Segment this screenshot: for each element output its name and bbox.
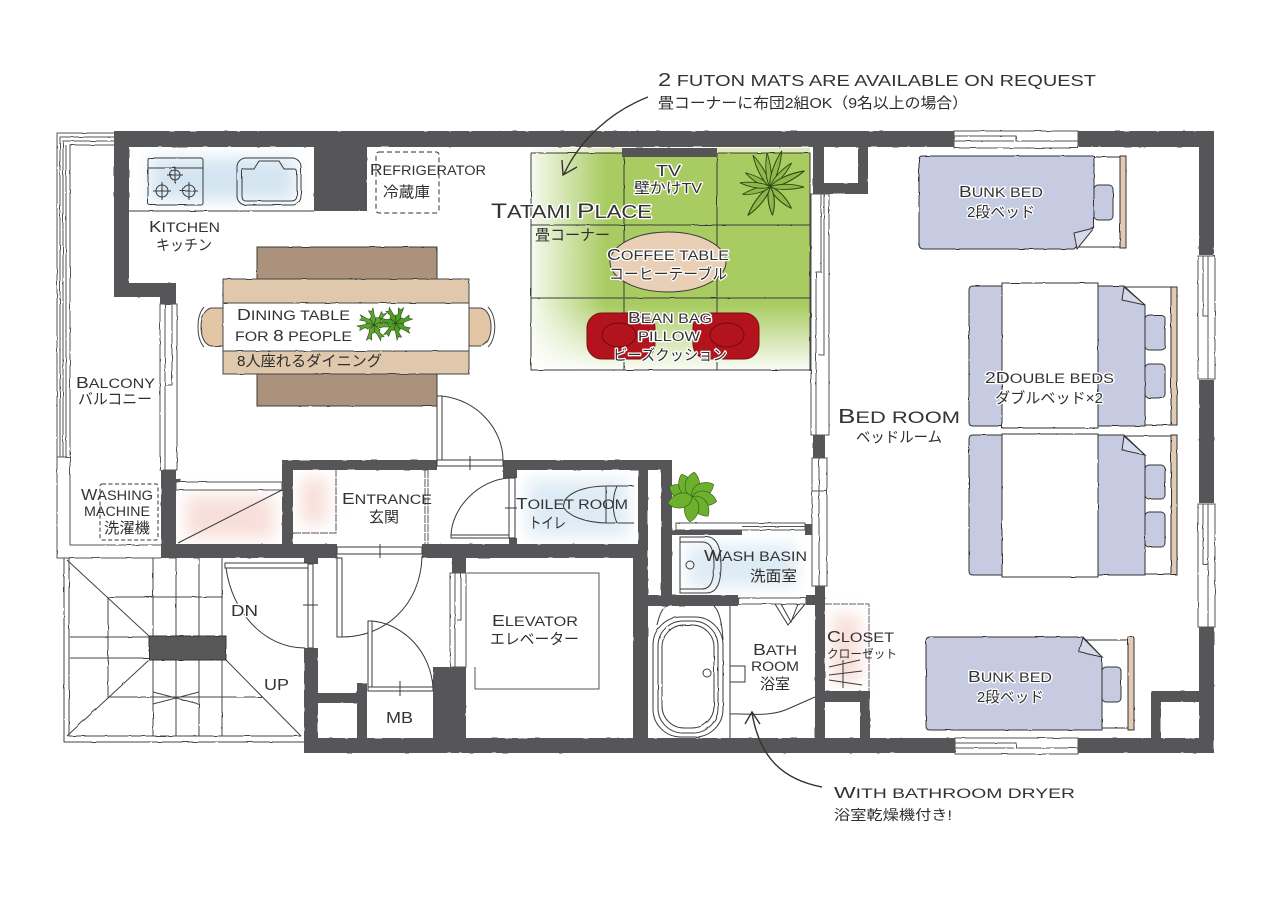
label: coffee table: コーヒーテーブル [609,265,727,283]
label: balcony: BALCONY [76,374,155,392]
label: bean bag pillow: PILLOW [638,329,700,344]
label: tatami place: TATAMI PLACE [491,199,652,223]
window: diagonal closet [176,482,282,490]
kitchen counter tint [150,158,295,200]
label: wash basin: 洗面室 [750,568,797,585]
stove [148,158,203,205]
label: TV: TV [656,163,681,180]
label: washing machine: 洗濯機 [104,520,150,537]
note: bathroom dryer: W ITH BATHROOM DRYER [834,784,1075,802]
label: coffee table: COFFEE TABLE [607,246,729,264]
label: elevator: エレベーター [490,631,579,648]
label: refrigerator: 冷蔵庫 [383,184,430,201]
window: balcony [160,304,177,470]
label: bean bag pillow [613,309,727,364]
label: kitchen [149,218,220,254]
label: tatami place [491,199,652,244]
label: entrance: ENTRANCE [342,490,432,508]
closet shelves [829,660,862,688]
label: kitchen: KITCHEN [149,218,220,236]
label: bunk bed top [959,183,1043,221]
door: meter box [368,621,433,696]
label: balcony [76,374,155,408]
label: tatami place: 畳コーナー [535,227,610,244]
label: bath room: ROOM [751,659,799,674]
window: bedroom right lower [1198,504,1215,627]
label: MB: MB [386,710,413,727]
double bed: upper [969,283,1177,428]
label: elevator: ELEVATOR [492,612,578,630]
label: wash basin [704,547,807,585]
label: bunk bed top: BUNK BED [959,183,1043,201]
bathtub [653,606,723,737]
label: dining table: FOR 8 PEOPLE [235,327,352,345]
label: entrance [342,490,432,526]
wash basin fixture [680,537,721,593]
sink [237,158,301,205]
note: bathroom dryer: 浴室乾燥機付き! [834,807,952,823]
label: bean bag pillow: BEAN BAG [628,309,712,327]
double bed: lower [969,434,1177,577]
label: elevator [490,612,579,648]
label: closet: クローゼット [827,647,897,661]
chairs [198,307,495,347]
window: elevator lobby [450,573,466,667]
pink closet tints [186,478,860,683]
label: bunk bed bottom [968,668,1052,706]
label: bed room: ベッドルーム [856,429,942,446]
label: balcony: バルコニー [78,391,152,408]
table [223,279,469,374]
note: futon mats: 2 FUTON MATS ARE AVAILABLE ON REQUEST [658,69,1097,90]
toilet fixture [563,486,634,523]
label: bean bag pillow: ビーズクッション [613,347,727,364]
label: toilet room: トイレ [529,515,566,532]
label: bath room [751,641,799,693]
label: bath room: BATH [753,641,797,659]
kitchen fixtures [129,158,314,211]
label: TV: 壁かけTV [634,180,702,197]
benches [257,247,437,406]
staircase [64,558,304,742]
label: washing machine: MACHINE [84,504,150,519]
bath door [738,598,806,604]
door: living room [437,396,503,470]
note: futon mats: 畳コーナーに布団2組OK（9名以上の場合） [658,95,968,112]
bath room partition [730,604,815,738]
label: washing machine: WASHING [81,486,153,504]
label: dining table [235,306,382,370]
label: entrance: 玄関 [369,509,399,526]
bunk bed: bottom [926,637,1134,730]
label: toilet room: TOILET ROOM [516,495,628,513]
plant: entrance [666,471,718,523]
coffee table [610,232,726,292]
label: bunk bed bottom: BUNK BED [968,668,1052,686]
label: bunk bed top: 2段ベッド [967,204,1035,221]
entrance closet outline [293,470,428,544]
refrigerator outline [376,152,439,213]
wall TV [622,148,717,157]
label: dining table: DINING TABLE [237,306,350,324]
label: dining table: 8人座れるダイニング [237,353,382,370]
window: tatami side [811,194,829,435]
floor plan [56,73,1216,822]
walls [114,131,1214,753]
label: toilet room [516,495,628,532]
arrow: dryer note to bath [745,712,822,787]
balcony [57,133,161,558]
label: refrigerator: REFRIGERATOR [370,161,486,179]
bean bag pillow [587,313,759,359]
label: wash basin: WASH BASIN [704,547,807,565]
arrow: futon note to tatami [562,97,648,175]
label: refrigerator [370,161,486,201]
label: bed room [838,406,960,446]
window: bedroom right upper [1198,256,1215,379]
blue wet room tints [528,480,796,587]
window: wash top [676,523,805,530]
door: toilet [451,478,517,538]
label: closet [827,628,897,661]
diagonal closet line [178,490,282,543]
label: double beds: ダブルベッド×2 [995,389,1103,407]
label: bunk bed bottom: 2段ベッド [977,689,1044,706]
label: double beds [985,369,1114,407]
dining set [198,247,495,406]
washing machine outline [100,484,158,540]
bunk bed: top [919,156,1126,249]
window: bedroom top [954,131,1078,148]
elevator cab [467,573,599,689]
label: bed room: BED ROOM [838,406,960,428]
note: futon mats [658,69,1097,112]
label: kitchen: キッチン [156,237,212,254]
label: TV [634,163,702,197]
label: washing machine [81,486,153,537]
windows [160,131,1215,754]
label: DN: DN [231,603,258,620]
door: entrance [337,544,422,637]
label: coffee table [607,246,729,283]
door: stairs [225,563,318,648]
label: UP: UP [264,677,289,694]
plant: tatami [740,150,806,217]
doors [225,396,517,696]
window: bedroom bottom [955,738,1078,754]
plant: dining table [357,306,413,342]
label: double beds: 2D OUBLE BEDS [985,369,1114,387]
note: bathroom dryer [834,784,1075,823]
window: bedroom to wash [812,458,827,586]
closet outline [825,604,869,691]
label: bath room: 浴室 [760,676,790,693]
tatami place [531,148,810,370]
label: closet: CLOSET [827,628,894,646]
